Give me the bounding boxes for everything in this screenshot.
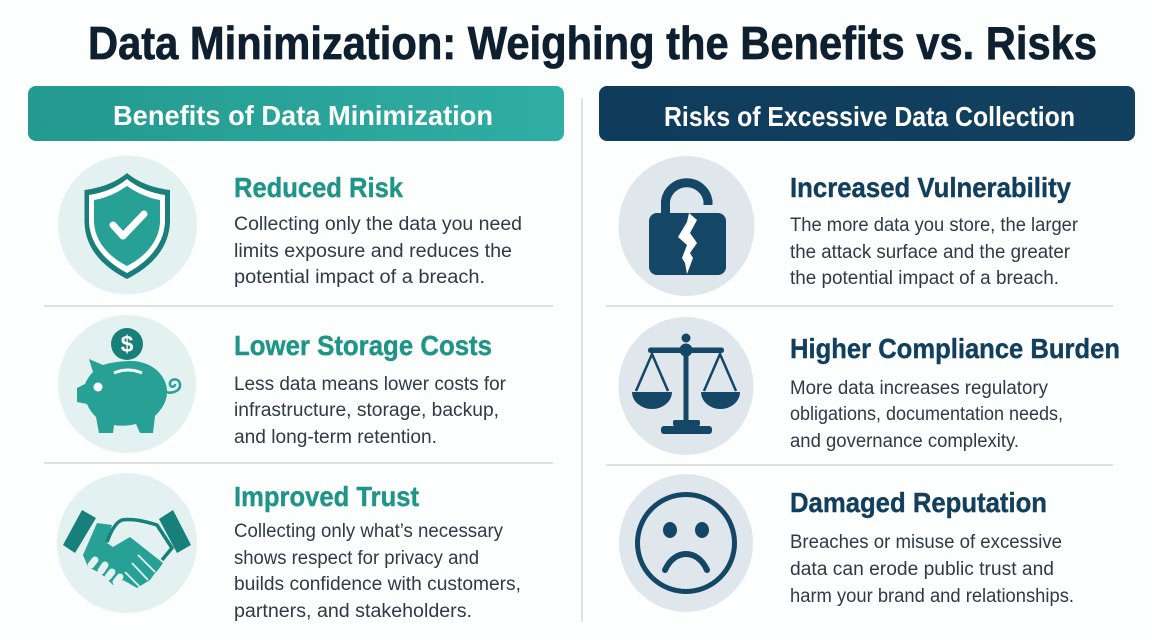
text: higher compliance burden: Higher Compliance Burden bbox=[790, 333, 1120, 364]
text: lower storage costs bbox=[234, 330, 507, 448]
risks header bbox=[599, 86, 1135, 141]
text: reduced risk: limits exposure and reduces the bbox=[234, 241, 512, 262]
text: increased vulnerability: the potential impact of a breach. bbox=[790, 268, 1059, 289]
icon: piggy bank: $ bbox=[121, 331, 134, 357]
text: damaged reputation: Breaches or misuse of excessive bbox=[790, 532, 1062, 553]
text: reduced risk: Reduced Risk bbox=[234, 172, 403, 203]
icon: sad face bbox=[619, 474, 753, 612]
benefits header: Benefits of Data Minimization bbox=[113, 100, 493, 131]
text: increased vulnerability: the attack surface and the greater bbox=[790, 242, 1071, 263]
text: increased vulnerability: The more data you store, the larger bbox=[790, 215, 1079, 236]
text: improved trust: builds confidence with customers, bbox=[234, 574, 521, 595]
text: higher compliance burden: More data increases regulatory bbox=[790, 378, 1048, 399]
text: damaged reputation bbox=[790, 487, 1074, 607]
text: increased vulnerability bbox=[790, 172, 1079, 289]
risks header: Risks of Excessive Data Collection bbox=[664, 101, 1075, 132]
text: improved trust: Collecting only what’s necessary bbox=[234, 521, 503, 542]
panel: benefits bbox=[28, 86, 564, 622]
icon: handshake bbox=[57, 473, 197, 613]
text: reduced risk bbox=[234, 172, 522, 288]
icon: balance scales bbox=[618, 317, 754, 455]
text: higher compliance burden: obligations, documentation needs, bbox=[790, 404, 1063, 425]
text: reduced risk: Collecting only the data you need bbox=[234, 214, 522, 235]
panel: risks bbox=[599, 86, 1135, 612]
text: lower storage costs: and long-term retention. bbox=[234, 427, 437, 448]
text: improved trust: partners, and stakeholders. bbox=[234, 601, 472, 622]
text: lower storage costs: Lower Storage Costs bbox=[234, 330, 492, 361]
icon: shield with check bbox=[58, 156, 197, 294]
text: higher compliance burden: and governance complexity. bbox=[790, 431, 1019, 452]
text: damaged reputation: Damaged Reputation bbox=[790, 487, 1047, 518]
text: improved trust: Improved Trust bbox=[234, 481, 419, 512]
icon: broken padlock bbox=[618, 156, 754, 296]
text: reduced risk: potential impact of a breach. bbox=[234, 267, 485, 288]
benefits header bbox=[28, 86, 564, 141]
text: increased vulnerability: Increased Vulnerability bbox=[790, 172, 1071, 203]
text: improved trust bbox=[234, 481, 521, 622]
icon: piggy bank bbox=[58, 315, 196, 453]
text: damaged reputation: data can erode public trust and bbox=[790, 559, 1054, 580]
text: damaged reputation: harm your brand and relationships. bbox=[790, 586, 1074, 607]
text: lower storage costs: infrastructure, storage, backup, bbox=[234, 400, 499, 421]
text: lower storage costs: Less data means lower costs for bbox=[234, 374, 507, 395]
text: higher compliance burden bbox=[790, 333, 1120, 452]
text: improved trust: shows respect for privacy and bbox=[234, 548, 479, 569]
